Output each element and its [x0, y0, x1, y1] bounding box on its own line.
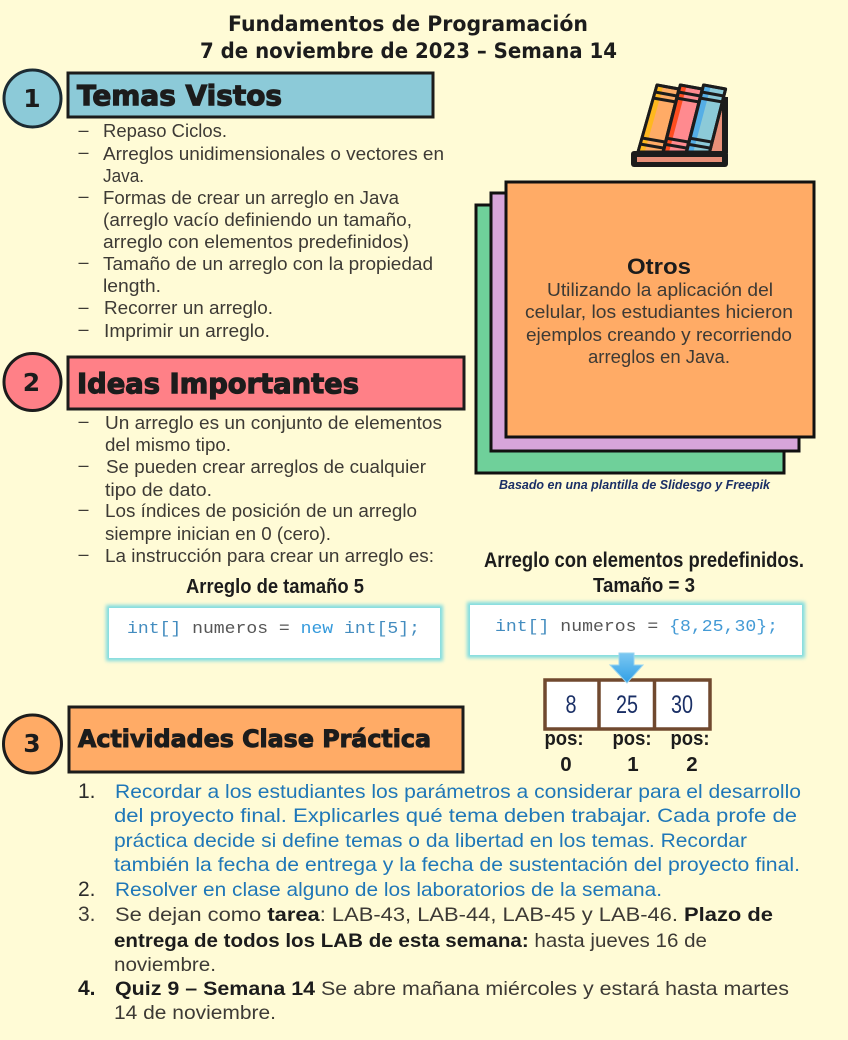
cells: 25: [616, 691, 638, 719]
section 1 heading: Temas Vistos: [68, 73, 433, 117]
list: temas vistos: –: [78, 186, 89, 206]
section 1 number badge: [4, 70, 61, 127]
text: Otros: celular, los estudiantes hicieron: [525, 302, 793, 322]
section 3 heading: Actividades Clase Práctica: [69, 707, 463, 772]
item 3: noviembre.: [114, 954, 216, 976]
section 2 number badge: [4, 354, 61, 410]
orange book: [638, 85, 679, 152]
icon: books on shelf: [631, 85, 728, 167]
blue book: [687, 85, 726, 152]
section 1 number badge: 1: [23, 84, 41, 113]
item 1: Recordar a los estudiantes los parámetros a considerar para el desarrollo: [115, 781, 801, 803]
list: temas vistos: Repaso Ciclos.: [103, 121, 227, 141]
title: 7 de noviembre de 2023 – Semana 14: [200, 39, 617, 63]
list: actividades: [78, 780, 801, 1024]
list: temas vistos: –: [78, 319, 89, 339]
item 4: 4.: [78, 977, 96, 1000]
list: ideas importantes: [78, 411, 442, 566]
text: Otros: ejemplos creando y recorriendo: [526, 325, 792, 345]
list: temas vistos: length.: [103, 276, 161, 296]
list: temas vistos: –: [78, 120, 89, 140]
item 1: práctica decide si define temas o da libertad en los temas. Recordar: [114, 830, 748, 852]
list: ideas importantes: siempre inician en 0 (cero).: [105, 524, 331, 544]
title: [200, 12, 617, 63]
section 3 number badge: [4, 715, 62, 773]
section 2 number badge: 2: [23, 368, 40, 397]
section 3 number badge: 3: [23, 729, 41, 758]
purple middle card: [491, 193, 799, 451]
item 3: 3.: [78, 903, 96, 926]
list: temas vistos: Recorrer un arreglo.: [104, 298, 273, 318]
position labels: 1: [627, 753, 639, 776]
position labels: pos:: [612, 727, 652, 750]
cells: [545, 680, 710, 729]
item 3: [78, 903, 773, 976]
item 1: del proyecto final. Explicarles qué tema deben trabajar. Cada profe de: [114, 805, 797, 827]
text: Otros: Otros: [627, 254, 691, 279]
item 2: 2.: [78, 878, 96, 901]
list: ideas importantes: tipo de dato.: [105, 480, 212, 500]
code caption: Arreglo de tamaño 5: Arreglo de tamaño 5: [186, 575, 364, 598]
green back card: [476, 205, 784, 473]
orange front card: [506, 182, 814, 437]
list: temas vistos: (arreglo vacío definiendo un tamaño,: [103, 210, 412, 230]
credit text: Basado en una plantilla de Slidesgo y Freepik: [499, 478, 771, 492]
position labels: 0: [560, 753, 572, 776]
position labels: pos:: [670, 727, 710, 750]
item 4: [78, 977, 789, 1024]
section 1 heading: Temas Vistos: Temas Vistos: [77, 79, 282, 112]
section 3 heading: Actividades Clase Práctica: Actividades Clase Práctica: [78, 725, 431, 753]
text: Otros: Utilizando la aplicación del: [547, 280, 773, 300]
arrow: [610, 653, 643, 683]
item 2: Resolver en clase alguno de los laboratorios de la semana.: [115, 879, 662, 901]
position labels: 2: [686, 753, 698, 776]
list: temas vistos: –: [78, 142, 89, 162]
item 1: 1.: [78, 780, 96, 803]
list: ideas importantes: La instrucción para crear un arreglo es:: [105, 546, 434, 566]
red book: [663, 85, 702, 152]
section 2 heading: Ideas Importantes: [68, 357, 464, 409]
caption: Arreglo con elementos predefinidos: [484, 548, 804, 597]
item 1: también la fecha de entrega y la fecha de sustentación del proyecto final.: [114, 854, 800, 876]
item 4: Quiz 9 – Semana 14 Se abre mañana miércoles y estará hasta martes: [115, 978, 789, 1000]
list: temas vistos: Arreglos unidimensionales o vectores en: [103, 144, 444, 164]
text: Otros: arreglos en Java.: [588, 347, 730, 367]
array diagram: [544, 653, 710, 776]
code box: predefined array: [470, 605, 802, 655]
item 3: entrega de todos los LAB de esta semana: hasta jueves 16 de: [114, 930, 707, 952]
list: ideas importantes: –: [78, 455, 89, 475]
list: ideas importantes: Se pueden crear arreglos de cualquier: [106, 457, 426, 477]
list: temas vistos: –: [78, 252, 89, 272]
code box: new array: int[] numeros = new int[5];: [127, 620, 420, 639]
cells: 8: [566, 691, 576, 719]
code box: new array: [109, 608, 440, 658]
item 3: Se dejan como tarea : LAB-43, LAB-44, LAB-45 y LAB-46. Plazo de: [115, 904, 773, 926]
cells: 30: [671, 691, 693, 719]
caption: Arreglo con elementos predefinidos: Arreglo con elementos predefinidos.: [484, 548, 804, 572]
shelf: [631, 151, 728, 167]
list: temas vistos: Tamaño de un arreglo con la propiedad: [103, 254, 433, 274]
list: temas vistos: arreglo con elementos predefinidos): [103, 232, 409, 252]
list: ideas importantes: Un arreglo es un conjunto de elementos: [105, 413, 442, 433]
caption: Arreglo con elementos predefinidos: Tamaño = 3: [593, 574, 695, 597]
list: ideas importantes: –: [78, 544, 89, 564]
list: temas vistos: Formas de crear un arreglo en Java: [103, 188, 400, 208]
item 4: 14 de noviembre.: [114, 1002, 276, 1024]
list: ideas importantes: Los índices de posición de un arreglo: [105, 501, 417, 521]
code box: predefined array: int[] numeros = {8,25,30};: [495, 618, 778, 637]
list: temas vistos: Imprimir un arreglo.: [104, 321, 270, 341]
list: temas vistos: –: [78, 297, 89, 317]
list: temas vistos: Java.: [103, 166, 144, 186]
list: ideas importantes: del mismo tipo.: [105, 435, 231, 455]
position labels: pos:: [544, 727, 584, 750]
item 1: [78, 780, 801, 876]
position labels: [544, 727, 710, 776]
text: Otros: [525, 254, 793, 367]
list: ideas importantes: –: [78, 411, 89, 431]
panel: stacked cards Otros: [476, 182, 814, 473]
list: temas vistos: [78, 120, 444, 341]
section 2 heading: Ideas Importantes: Ideas Importantes: [77, 367, 359, 400]
list: ideas importantes: –: [78, 499, 89, 519]
title: Fundamentos de Programación: [228, 12, 588, 36]
